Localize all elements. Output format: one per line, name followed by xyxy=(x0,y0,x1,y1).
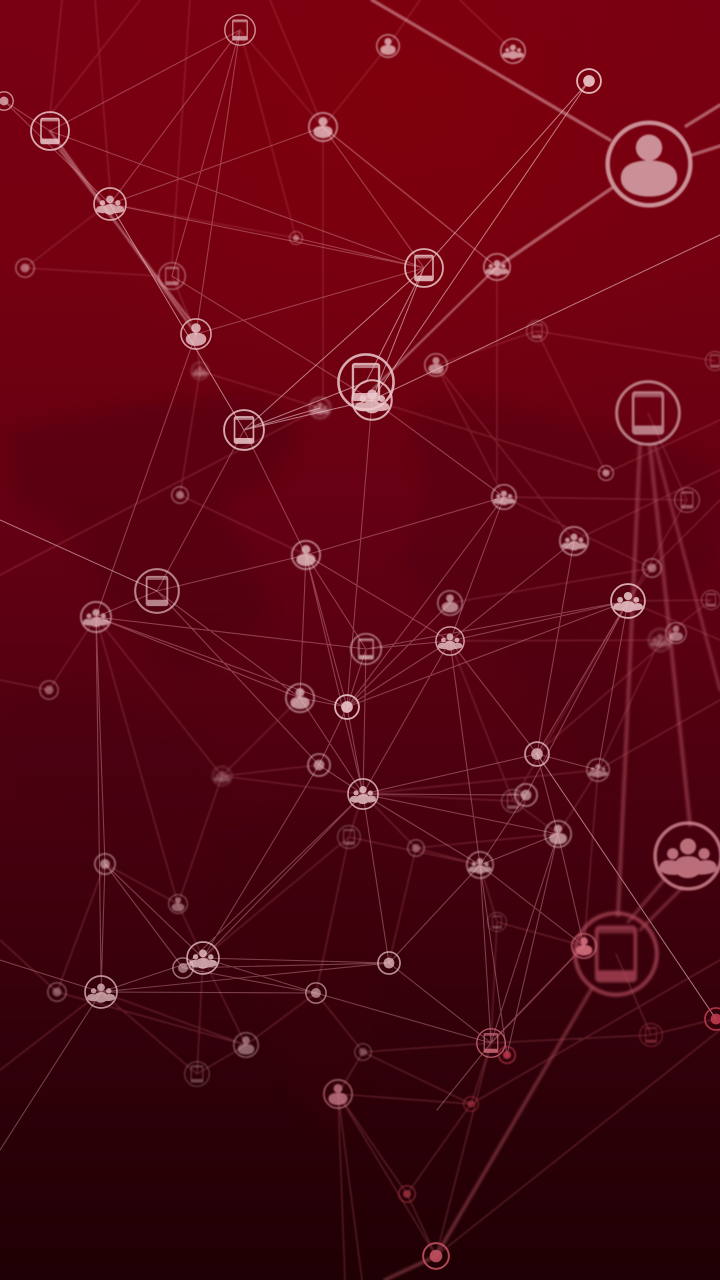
node: dot lower right xyxy=(515,784,537,806)
node: faint tablet right edge xyxy=(702,590,720,610)
node: tablet faint bottom right xyxy=(640,1024,662,1046)
node: tablet faint bottom xyxy=(488,912,506,932)
node: tablet blurred right xyxy=(527,321,547,341)
connection lines: mid links xyxy=(0,30,628,1150)
node: dot left xyxy=(16,259,34,277)
node: user blurred xyxy=(425,354,447,376)
node: dot bottom center xyxy=(306,983,326,1003)
node: large user top right xyxy=(608,123,690,205)
node: dot lower right of center xyxy=(525,742,549,766)
node: tablet bottom center xyxy=(477,1029,505,1057)
node: reddish user xyxy=(572,934,596,958)
node: group lower right xyxy=(467,852,493,878)
node: tablet far right xyxy=(675,488,699,512)
node: red dot bottom center xyxy=(499,1047,515,1063)
node: dot lower left xyxy=(95,854,115,874)
node: group lower center xyxy=(348,779,378,809)
node: tablet middle xyxy=(351,634,381,664)
node: dot far left xyxy=(40,681,58,699)
node: large reddish tablet xyxy=(575,913,657,995)
node: group right middle xyxy=(560,527,588,555)
node: small group top xyxy=(501,39,525,63)
node: tiny dot xyxy=(290,232,302,244)
node: dot beside group lower left xyxy=(173,958,193,978)
dark world map xyxy=(0,395,720,1140)
node: group blurred center xyxy=(310,398,330,418)
node: tablet right edge xyxy=(706,352,720,370)
node: small dot right xyxy=(599,466,613,480)
node: user faint xyxy=(192,363,208,379)
node: tablet upper left xyxy=(31,112,69,150)
node: group lower left xyxy=(187,942,219,974)
node: dot bottom left xyxy=(48,983,66,1001)
node: user lower middle xyxy=(286,684,314,712)
node: dot bottom edge xyxy=(423,1243,449,1269)
node: group faint left xyxy=(213,767,231,785)
node: dot lower middle xyxy=(335,695,359,719)
node: red dot lower bottom xyxy=(399,1186,415,1202)
node: faint dot right xyxy=(643,559,661,577)
node: tablet faint lower right xyxy=(502,790,524,812)
node: tablet center left xyxy=(224,410,264,450)
node: group left middle xyxy=(81,602,111,632)
connection lines: blurred links near the camera xyxy=(385,445,720,1280)
node: group center middle xyxy=(436,627,464,655)
node: group upper left xyxy=(94,188,126,220)
node: large group right edge xyxy=(655,823,720,889)
node: user middle xyxy=(292,541,320,569)
node: overlapping group center xyxy=(352,380,392,420)
node: user right of center xyxy=(438,591,462,615)
node: dot left edge xyxy=(0,92,13,110)
node: small dot lower center xyxy=(408,840,424,856)
node: user bottom xyxy=(234,1033,258,1057)
connection lines: thick foreground links xyxy=(50,0,720,390)
node: tablet faint xyxy=(159,263,185,289)
node: tablet left middle xyxy=(135,569,179,613)
node: small user top xyxy=(377,35,399,57)
node: user upper middle xyxy=(309,113,337,141)
node: group right xyxy=(611,584,645,618)
connection lines: bright thin links xyxy=(0,81,720,1019)
node: red dot small bottom xyxy=(464,1097,478,1111)
node: faint group right xyxy=(649,629,671,651)
node: tablet bottom left xyxy=(185,1062,209,1086)
node: group bottom left xyxy=(85,976,117,1008)
node: user lower right xyxy=(545,821,571,847)
node: dot bottom center small xyxy=(355,1044,371,1060)
node: tablet center xyxy=(405,249,443,287)
node: large tablet right xyxy=(617,382,679,444)
node: user small lower left xyxy=(169,895,187,913)
node: red dot right edge xyxy=(705,1008,720,1030)
node: group center right xyxy=(484,254,510,280)
node: dot left middle xyxy=(172,487,188,503)
node: dot lower center right xyxy=(378,952,400,974)
node: user left xyxy=(181,319,211,349)
node: group mid right xyxy=(492,485,516,509)
node: user bottom center xyxy=(324,1080,352,1108)
node: tablet top xyxy=(225,15,255,45)
node: dot top right xyxy=(577,69,601,93)
node: faint user right xyxy=(666,623,686,643)
node: tablet faint lower center xyxy=(338,826,360,848)
node: large tablet center xyxy=(338,354,394,410)
node: dot lower center xyxy=(308,754,330,776)
node: group faint right xyxy=(587,759,609,781)
